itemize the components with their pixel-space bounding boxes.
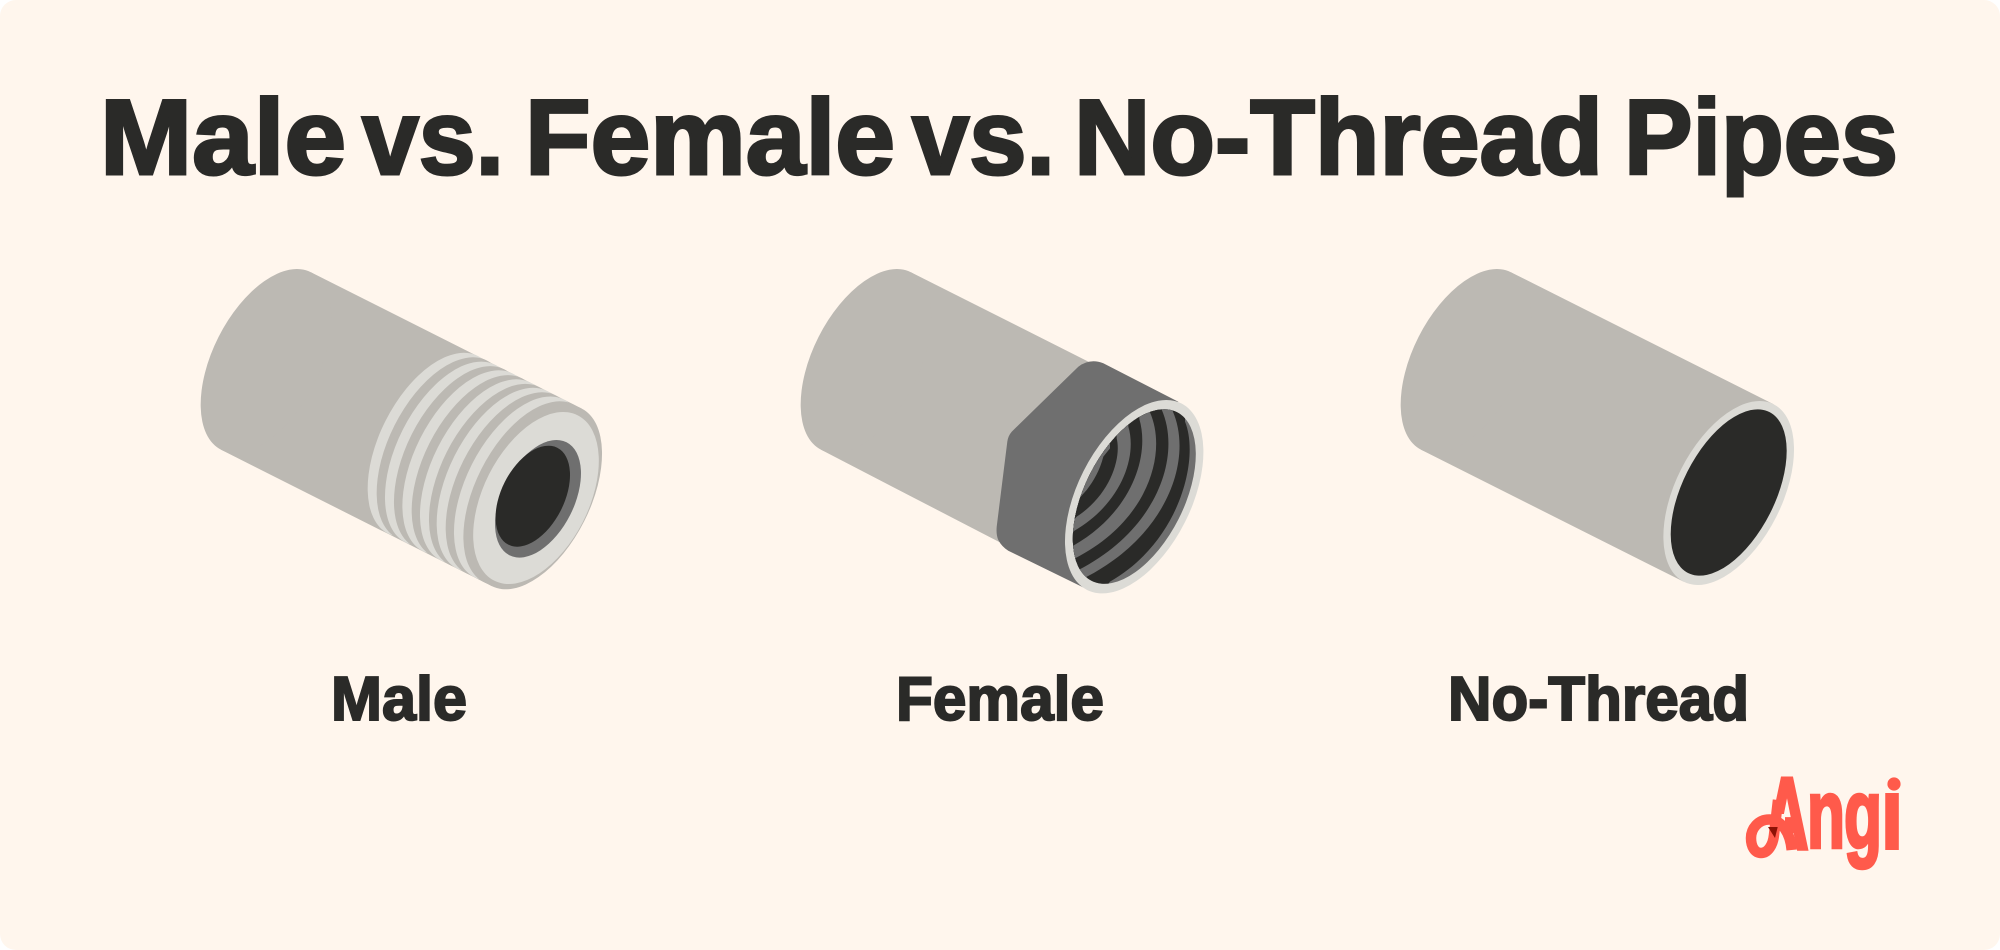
pipe back end — [174, 248, 358, 474]
rim — [1036, 378, 1232, 616]
hole — [1647, 391, 1811, 594]
logo loop shadow — [1768, 827, 1778, 838]
label: male: Male — [331, 665, 467, 734]
title: vs. — [362, 77, 504, 197]
illustration: male threaded pipe — [174, 248, 629, 610]
pipe body — [821, 272, 1095, 545]
logo letters ngi: n — [1807, 758, 1845, 868]
title — [100, 77, 1898, 197]
internal threads — [1072, 409, 1196, 584]
title: No-Thread — [1074, 77, 1603, 197]
title: Pipes — [1624, 77, 1898, 197]
external threads — [341, 332, 629, 610]
hole — [480, 434, 585, 559]
logo loop — [1751, 800, 1792, 853]
title: Male — [100, 77, 346, 197]
label: female: Female — [896, 665, 1104, 734]
rim — [1636, 380, 1821, 606]
logo: Angi — [1746, 776, 1901, 870]
pipe end face — [447, 392, 625, 604]
pipe body — [221, 272, 582, 586]
illustration: female threaded pipe — [800, 269, 1204, 594]
logo letters ngi: g — [1844, 758, 1882, 868]
pipe back end — [774, 248, 958, 474]
title: Female — [525, 77, 895, 197]
inner wall — [477, 426, 599, 572]
logo letter A: A — [1766, 758, 1808, 870]
pipe back end — [1374, 248, 1558, 474]
label: no-thread: No-Thread — [1448, 665, 1749, 734]
title: vs. — [912, 77, 1055, 197]
logo letters ngi — [1807, 758, 1902, 868]
illustration: no-thread pipe — [1374, 248, 1821, 606]
collar — [997, 361, 1178, 588]
logo letters ngi: ı — [1882, 758, 1902, 868]
pipe body — [1421, 272, 1774, 582]
